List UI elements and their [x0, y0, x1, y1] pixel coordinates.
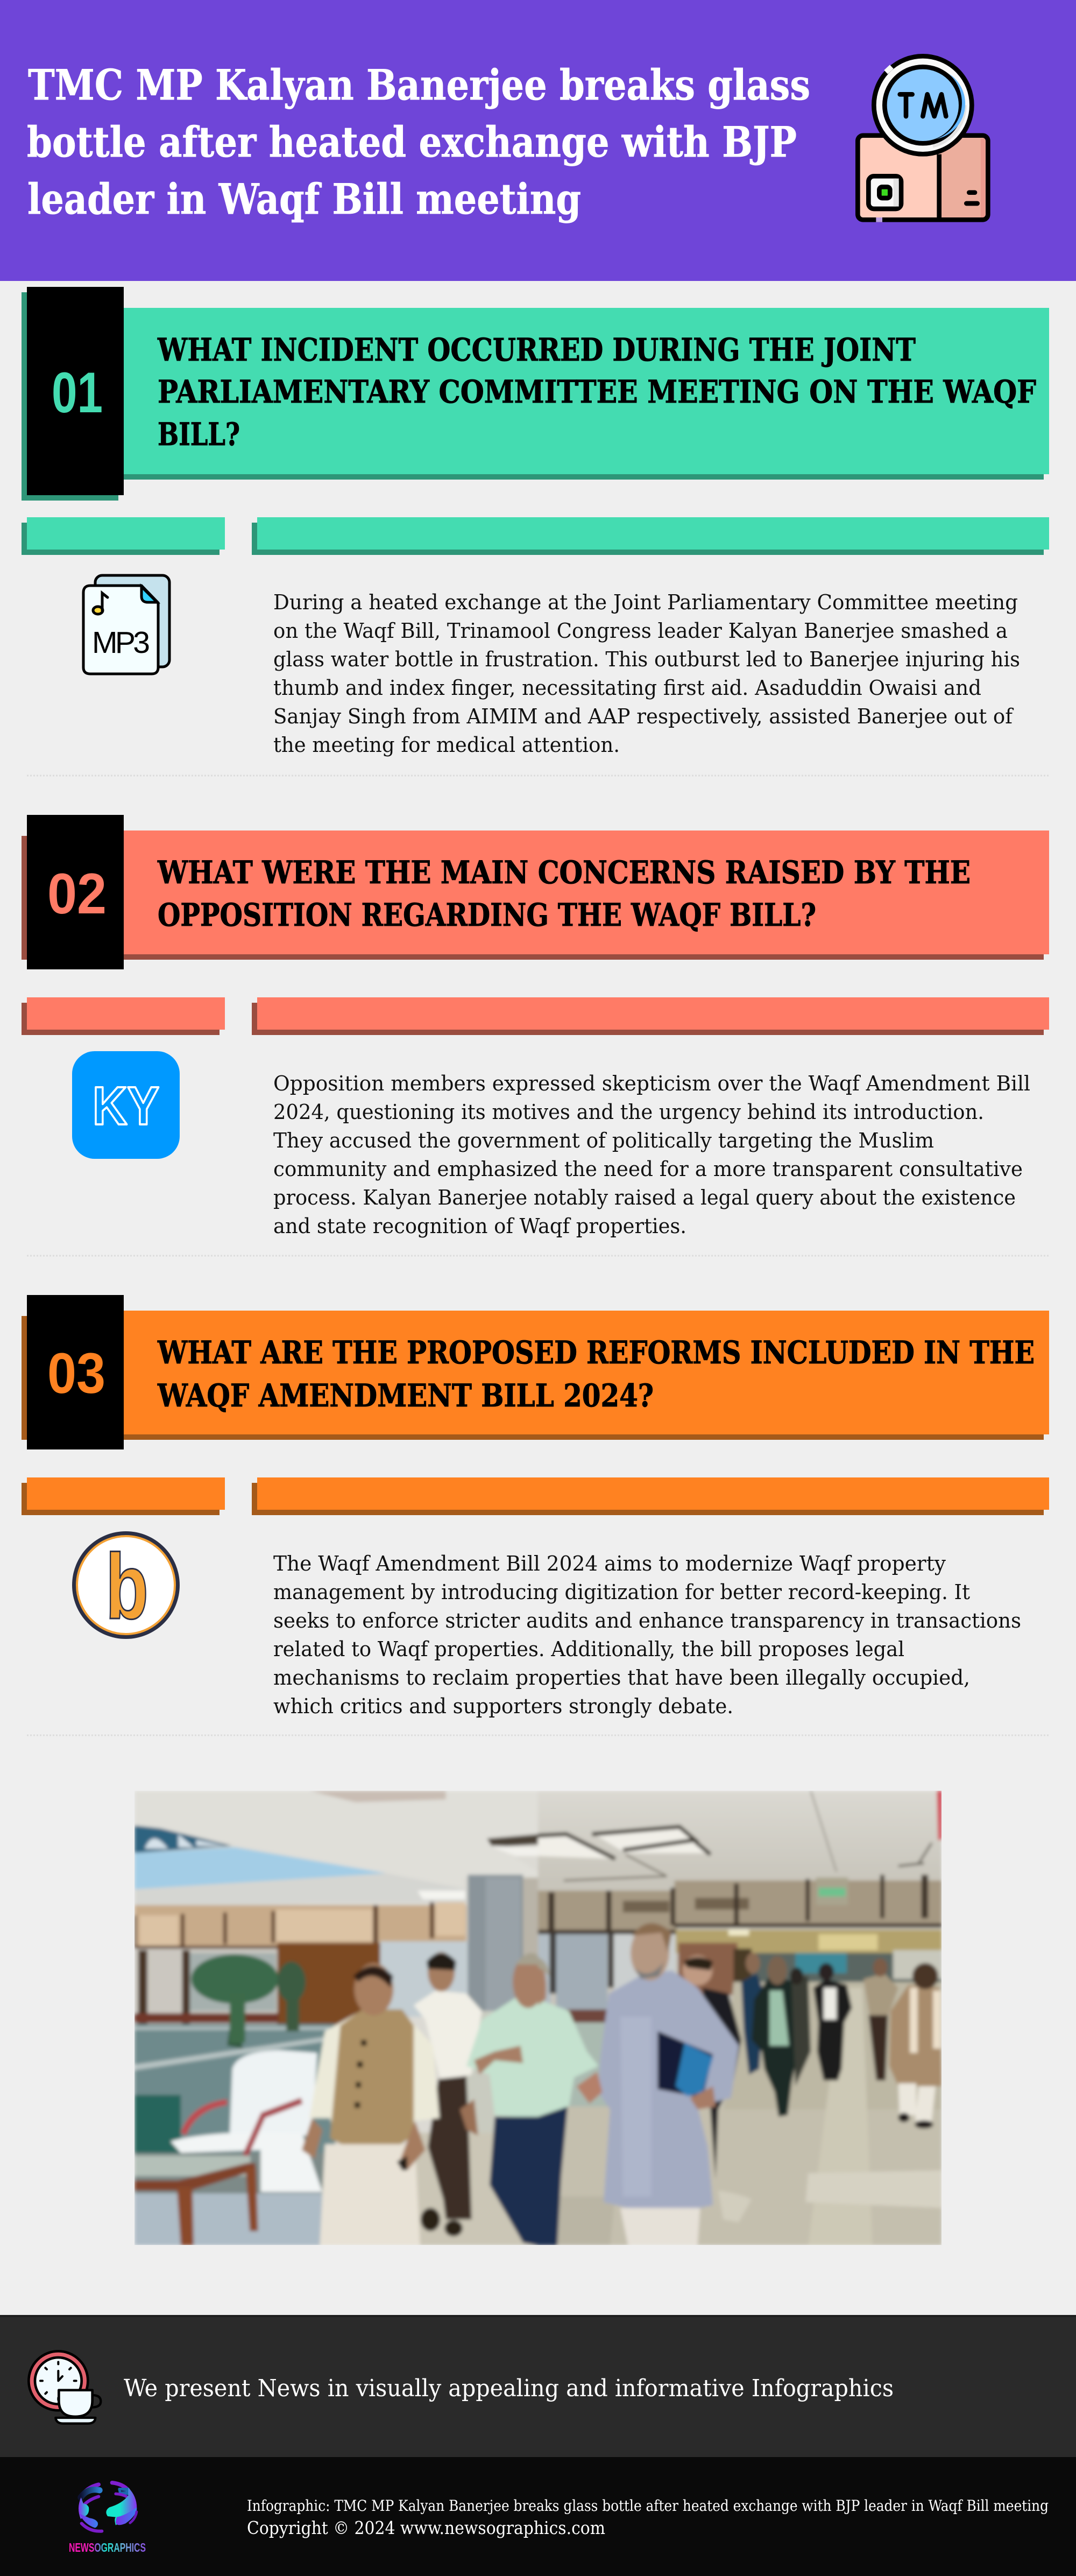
icon: MP3 file: MP3 [92, 625, 150, 660]
third man left side [466, 1998, 539, 2118]
panel: section 1 [22, 287, 1049, 757]
man behind kurta [703, 1988, 741, 2179]
panel: tagline band [0, 2315, 1076, 2457]
panel: section 3 [22, 1295, 1049, 1718]
icon: b logo [72, 1531, 180, 1639]
heading bar 2 [22, 815, 1049, 969]
sub bars 1 [22, 517, 1049, 555]
first man [309, 2011, 440, 2138]
icon: b logo: b [105, 1535, 148, 1638]
body text 2: process. Kalyan Banerjee notably raised a legal query about the existence [273, 1186, 1016, 1209]
body text 2: community and emphasized the need for a more transparent consultative [273, 1157, 1023, 1181]
body text 3: which critics and supporters strongly debate. [273, 1694, 733, 1718]
icon: clock and cup [29, 2351, 101, 2424]
question 2: OPPOSITION REGARDING THE WAQF BILL? [158, 897, 816, 933]
question 2: WHAT WERE THE MAIN CONCERNS RAISED BY THE [157, 854, 971, 891]
body text 3: mechanisms to reclaim properties that have been illegally occupied, [273, 1666, 970, 1690]
number 01: 01 [52, 360, 103, 425]
question 1 [157, 332, 1036, 453]
question 2 [157, 854, 971, 933]
body text 1: thumb and index finger, necessitating first aid. Asaduddin Owaisi and [273, 676, 981, 700]
body text 3: management by introducing digitization for better record-keeping. It [273, 1580, 970, 1604]
panel: section 2 [22, 815, 1049, 1238]
body text 1: Sanjay Singh from AIMIM and AAP respectively, assisted Banerjee out of [273, 705, 1014, 728]
sub bars 2 [22, 997, 1049, 1035]
body text 1: During a heated exchange at the Joint Parliamentary Committee meeting [273, 590, 1018, 614]
fourth man in kurta [598, 1970, 739, 2216]
title [27, 61, 810, 224]
sub bars 3 [22, 1477, 1049, 1515]
body text 2: Opposition members expressed skepticism over the Waqf Amendment Bill [273, 1072, 1030, 1095]
body text 3: seeks to enforce stricter audits and enhance transparency in transactions [273, 1609, 1021, 1632]
icon: trademark box [858, 56, 988, 220]
body text 1 [273, 590, 1020, 757]
logo: NEWSOGRAPHICS [69, 2540, 146, 2554]
body text 1: glass water bottle in frustration. This outburst led to Banerjee injuring his [273, 647, 1020, 671]
icon: MP3 file [83, 575, 169, 674]
second man [414, 1990, 482, 2080]
number 03: 03 [47, 1341, 105, 1405]
body text 3: The Waqf Amendment Bill 2024 aims to modernize Waqf property [273, 1552, 946, 1575]
number 02: 02 [47, 861, 107, 926]
panel: header [0, 0, 1076, 281]
icon: KY badge: KY [93, 1076, 159, 1136]
background people [741, 1973, 764, 2075]
copyright line: Copyright © 2024 www.newsographics.com [247, 2517, 605, 2538]
question 1: WHAT INCIDENT OCCURRED DURING THE JOINT [157, 332, 916, 368]
icon: KY badge [72, 1051, 180, 1159]
panel: footer [0, 2457, 1076, 2576]
credit line: Infographic: TMC MP Kalyan Banerjee breaks glass bottle after heated exchange with BJP leader in Waqf Bill meeting [247, 2497, 1049, 2515]
body text 2: 2024, questioning its motives and the urgency behind its introduction. [273, 1100, 984, 1124]
third man right side [538, 2000, 598, 2117]
body text 2 [273, 1072, 1030, 1238]
heading bar 1 [22, 287, 1049, 501]
body text 2: and state recognition of Waqf properties. [273, 1214, 686, 1238]
question 1: BILL? [158, 416, 240, 453]
title: leader in Waqf Bill meeting [27, 175, 581, 224]
question 3 [157, 1334, 1035, 1414]
body text 3: related to Waqf properties. Additionally, the bill proposes legal [273, 1637, 904, 1661]
body text 1: on the Waqf Bill, Trinamool Congress leader Kalyan Banerjee smashed a [273, 619, 1008, 643]
body text 1: the meeting for medical attention. [273, 733, 620, 757]
title: TMC MP Kalyan Banerjee breaks glass [28, 61, 810, 110]
photo: leaders walking through parliament corridor [134, 1791, 942, 2246]
question 3: WAQF AMENDMENT BILL 2024? [157, 1377, 654, 1414]
tagline: We present News in visually appealing and informative Infographics [124, 2375, 894, 2402]
logo [69, 2483, 146, 2554]
body text 3 [273, 1552, 1021, 1718]
title: bottle after heated exchange with BJP [27, 118, 797, 167]
heading bar 3 [22, 1295, 1049, 1449]
body text 2: They accused the government of politically targeting the Muslim [273, 1129, 934, 1152]
